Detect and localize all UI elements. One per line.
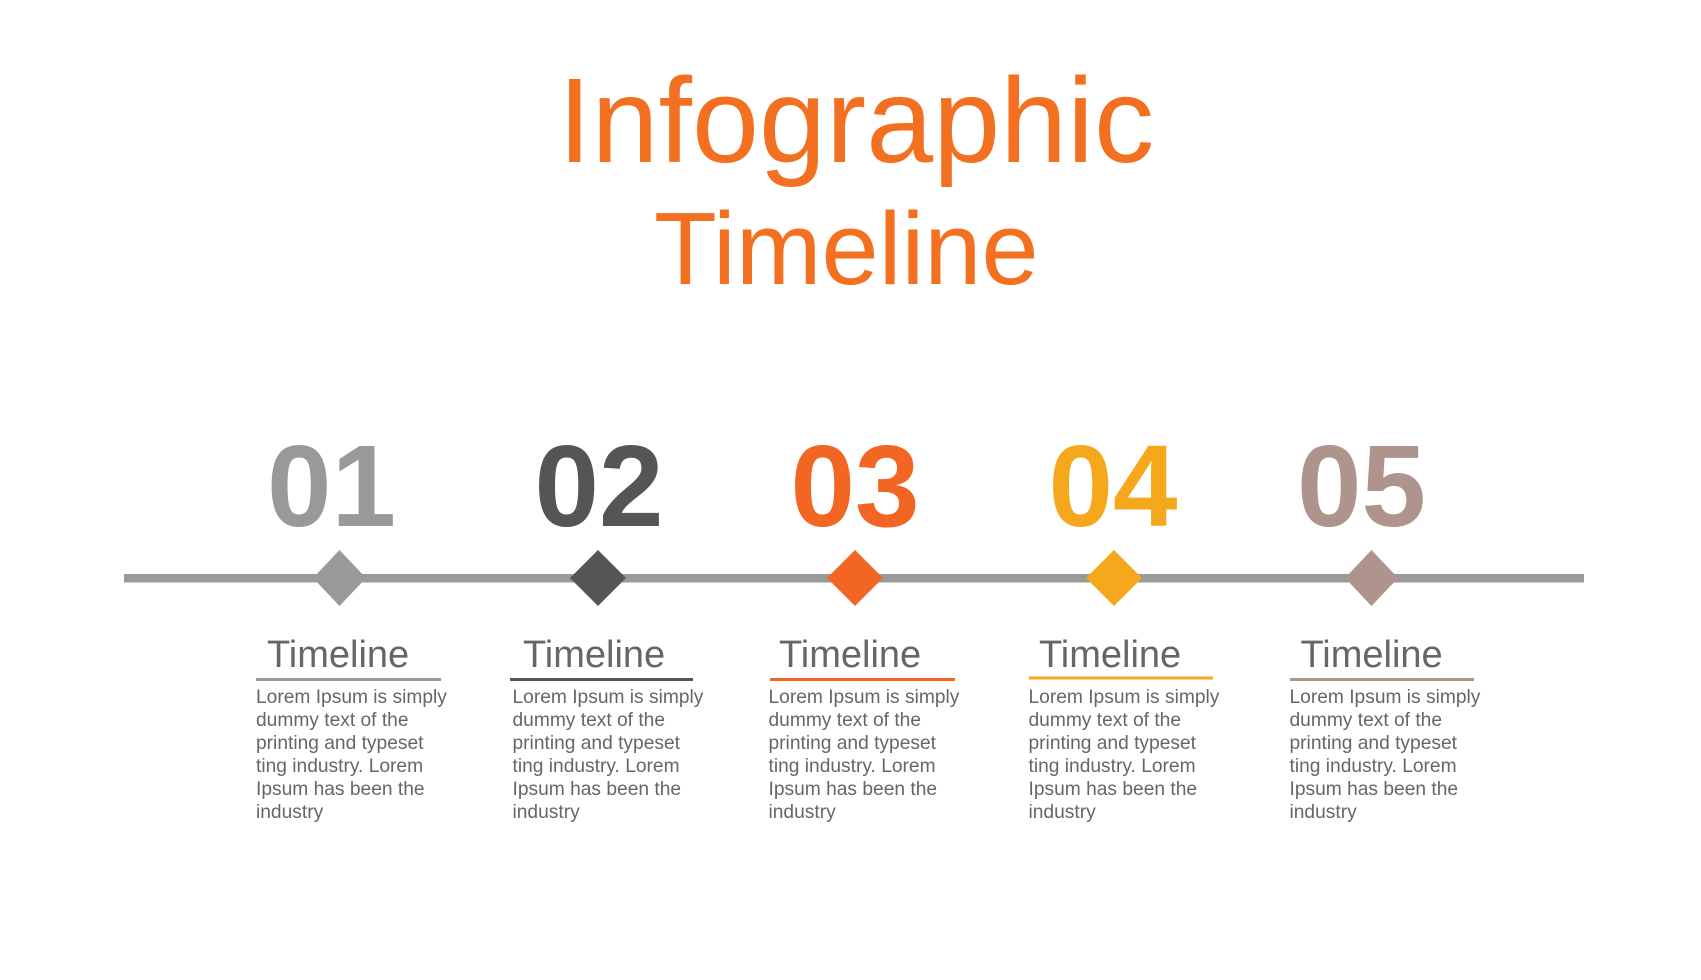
step 02 description: dummy text of the	[512, 710, 665, 731]
number 02: 02	[534, 421, 664, 551]
step 05 description: Ipsum has been the	[1290, 779, 1458, 800]
step 05 description: industry	[1290, 802, 1357, 823]
step 04 description: ting industry. Lorem	[1028, 756, 1196, 777]
step 04 heading: Timeline	[1039, 634, 1181, 676]
step 01 underline	[256, 678, 441, 681]
step 03 description: Lorem Ipsum is simply	[768, 687, 960, 708]
step 03 description: Ipsum has been the	[768, 779, 937, 800]
step 02 description: Lorem Ipsum is simply	[512, 687, 704, 708]
step 04 description: Ipsum has been the	[1028, 779, 1197, 800]
diamond marker 01	[313, 550, 366, 606]
step 04 underline	[1029, 676, 1213, 680]
title: Infographic: Infographic	[558, 53, 1154, 188]
step 02 description: ting industry. Lorem	[512, 756, 680, 777]
number 04: 04	[1048, 421, 1178, 551]
step 05 underline	[1290, 678, 1474, 681]
step 02 underline	[510, 678, 693, 681]
step 02 description: Ipsum has been the	[512, 779, 681, 800]
step 04 description: industry	[1028, 802, 1096, 823]
step 01 description: printing and typeset	[256, 733, 424, 754]
step 04 description: dummy text of the	[1028, 710, 1181, 731]
timeline axis line	[124, 574, 1584, 582]
step 05 description: printing and typeset	[1290, 733, 1458, 754]
step 04 description: printing and typeset	[1028, 733, 1197, 754]
step 05 description: ting industry. Lorem	[1290, 756, 1457, 777]
step 02 heading: Timeline	[523, 634, 665, 676]
step 03 description: dummy text of the	[768, 710, 921, 731]
step 01 description: dummy text of the	[256, 710, 408, 731]
step 05 description: Lorem Ipsum is simply	[1290, 687, 1481, 708]
step 03 description: printing and typeset	[768, 733, 937, 754]
diamond marker 04	[1086, 550, 1142, 606]
step 04	[1028, 421, 1220, 823]
step 01 description: Ipsum has been the	[256, 779, 425, 800]
diamond marker 05	[1345, 550, 1398, 606]
step 05 heading: Timeline	[1300, 634, 1443, 676]
subtitle: Timeline: Timeline	[654, 191, 1039, 306]
step 03 heading: Timeline	[779, 634, 921, 676]
step 02	[510, 421, 704, 823]
step 02 description: industry	[512, 802, 580, 823]
step 01 description: ting industry. Lorem	[256, 756, 423, 777]
step 05 description: dummy text of the	[1290, 710, 1442, 731]
step 01 heading: Timeline	[267, 634, 409, 676]
step 04 description: Lorem Ipsum is simply	[1028, 687, 1220, 708]
number 05: 05	[1297, 421, 1426, 551]
number 03: 03	[790, 421, 920, 551]
step 03	[768, 421, 960, 823]
step 01	[256, 421, 447, 823]
step 03 description: ting industry. Lorem	[768, 756, 936, 777]
step 05	[1290, 421, 1481, 823]
step 02 description: printing and typeset	[512, 733, 681, 754]
diamond marker 03	[827, 550, 883, 606]
diamond marker 02	[570, 550, 626, 606]
step 03 underline	[770, 678, 955, 681]
step 01 description: industry	[256, 802, 324, 823]
step 03 description: industry	[768, 802, 836, 823]
number 01: 01	[267, 421, 396, 551]
step 01 description: Lorem Ipsum is simply	[256, 687, 447, 708]
